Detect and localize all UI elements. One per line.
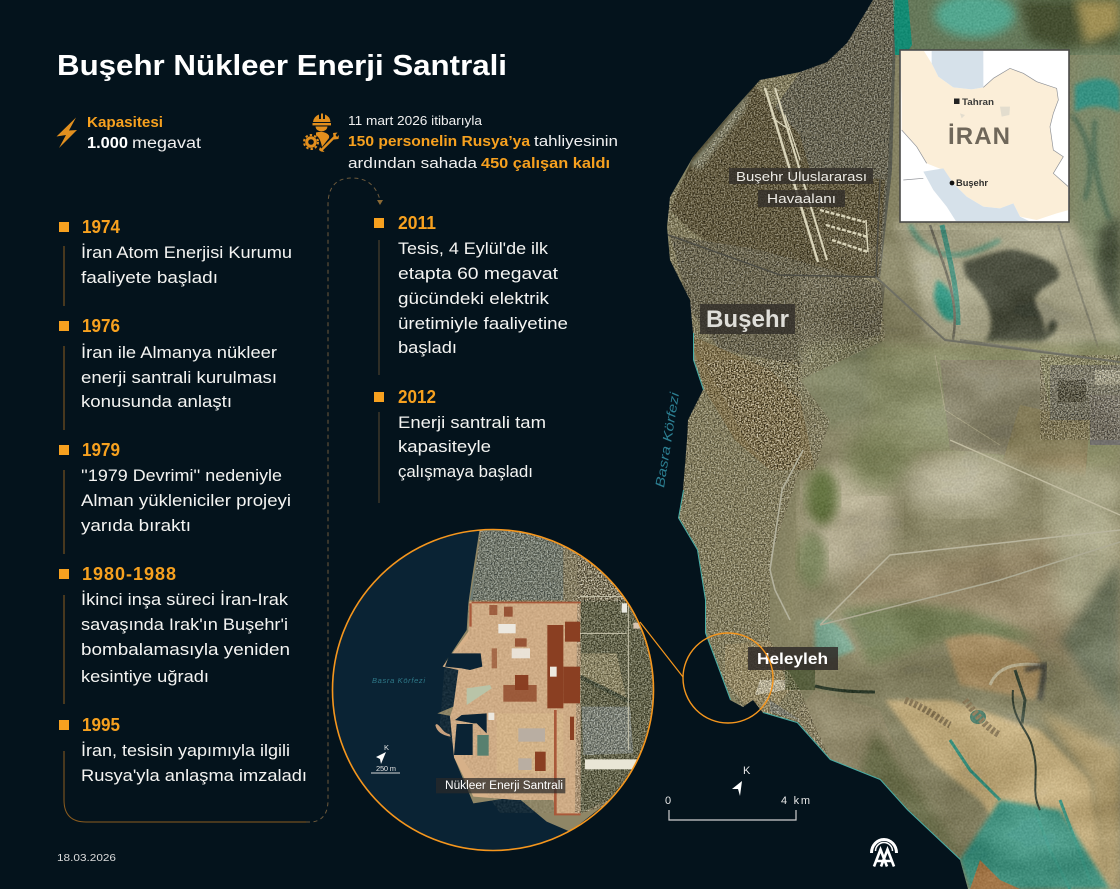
2011: gücündeki elektrik bbox=[398, 290, 550, 308]
plant rust blocks bbox=[489, 605, 580, 771]
1979 bbox=[59, 440, 291, 535]
1995: İran, tesisin yapımıyla ilgili bbox=[81, 741, 290, 760]
2011: başladı bbox=[398, 339, 457, 357]
plains south of the highway bbox=[868, 338, 1117, 467]
2012: 2012 bbox=[398, 387, 436, 407]
mottling and grain bbox=[800, 230, 1120, 889]
2011: üretimiyle faaliyetine bbox=[398, 315, 568, 333]
icon: worker bbox=[304, 114, 339, 152]
circle labels: 250 m bbox=[376, 764, 396, 773]
label: airport bbox=[729, 168, 873, 207]
label band bbox=[436, 778, 565, 793]
1980-1988: 1980-1988 bbox=[82, 564, 176, 584]
locator map: Iran bbox=[900, 50, 1069, 222]
green scrub bbox=[580, 600, 653, 813]
1974 bbox=[59, 217, 292, 287]
2012: kapasiteyle bbox=[398, 438, 491, 456]
roads bbox=[660, 180, 1120, 625]
country name: İRAN bbox=[948, 123, 1010, 150]
AA logo bbox=[872, 840, 896, 866]
date: 18.03.2026 bbox=[57, 852, 116, 864]
mudflats bbox=[780, 430, 1120, 740]
personnel note: 11 mart 2026 itibarıyla bbox=[348, 114, 482, 128]
1979: ''1979 Devrimi'' nedeniyle bbox=[81, 467, 282, 485]
1980-1988: bombalamasıyla yeniden bbox=[81, 641, 290, 659]
shallow coast bbox=[678, 333, 960, 860]
1980-1988: İkinci inşa süreci İran-Irak bbox=[81, 590, 289, 609]
1976 bbox=[59, 316, 278, 411]
timeline: left column bbox=[59, 217, 307, 785]
1976: İran ile Almanya nükleer bbox=[81, 343, 278, 362]
detail land bbox=[438, 530, 609, 831]
circle labels: Basra Körfezi bbox=[372, 676, 425, 685]
harbour basins bbox=[435, 653, 489, 756]
1995 bbox=[59, 715, 307, 785]
timeline connector bbox=[64, 178, 383, 822]
label: Basra Körfezi: Basra Körfezi bbox=[652, 390, 682, 488]
2012: Enerji santrali tam bbox=[398, 414, 546, 432]
label: Buşehr: Buşehr bbox=[706, 306, 789, 333]
satellite map bbox=[660, 0, 1120, 889]
1974: faaliyete başladı bbox=[81, 269, 218, 287]
map scale and north arrow: K bbox=[743, 765, 751, 777]
inset circle: nuclear plant detail bbox=[332, 528, 654, 852]
personnel note: 450 çalışan kaldı bbox=[481, 155, 610, 172]
1979: 1979 bbox=[82, 440, 120, 460]
Heleyleh town bbox=[725, 640, 815, 720]
1995: 1995 bbox=[82, 715, 120, 735]
capacity: 1.000 bbox=[87, 135, 128, 152]
timeline: right column bbox=[374, 213, 568, 481]
1979: yarıda bıraktı bbox=[81, 517, 191, 535]
map scale and north arrow bbox=[665, 765, 810, 820]
capacity: megavat bbox=[132, 135, 202, 152]
2011: etapta 60 megavat bbox=[398, 265, 558, 283]
airport runways bbox=[765, 88, 868, 262]
1974: İran Atom Enerjisi Kurumu bbox=[81, 243, 292, 262]
2012: çalışmaya başladı bbox=[398, 463, 533, 481]
2011: Tesis, 4 Eylül'de ilk bbox=[398, 240, 549, 258]
circle labels: Nükleer Enerji Santrali bbox=[445, 780, 563, 792]
personnel note: ardından sahada bbox=[348, 155, 478, 172]
1995: Rusya'yla anlaşma imzaladı bbox=[81, 767, 307, 785]
river channel bbox=[815, 686, 875, 692]
map scale and north arrow: 4 km bbox=[781, 795, 810, 807]
1974: 1974 bbox=[82, 217, 120, 237]
circle labels bbox=[371, 676, 563, 792]
label: Heleyleh: Heleyleh bbox=[757, 651, 828, 668]
plant buildings bbox=[467, 624, 557, 770]
title: Buşehr Nükleer Enerji Santrali bbox=[57, 50, 507, 82]
central salt flats, marsh and lagoon bbox=[892, 222, 1120, 360]
Bushehr marker bbox=[950, 180, 988, 188]
map scale and north arrow: 0 bbox=[665, 795, 671, 807]
icon: lightning bbox=[56, 118, 77, 148]
zoom connector circle bbox=[640, 622, 773, 723]
label: Heleyleh bbox=[748, 647, 838, 670]
1979: Alman yükleniciler projeyi bbox=[81, 492, 291, 510]
capacity: Kapasitesi bbox=[87, 115, 163, 131]
2011 bbox=[374, 213, 568, 357]
label: airport: Buşehr Uluslararası bbox=[736, 169, 867, 184]
settlement bbox=[470, 530, 563, 600]
Tehran marker: Tahran bbox=[962, 97, 994, 108]
southern tidal flats bbox=[790, 690, 1120, 889]
personnel note bbox=[348, 114, 618, 172]
1976: 1976 bbox=[82, 316, 120, 336]
label: airport: Havaalanı bbox=[767, 191, 836, 206]
1980-1988 bbox=[59, 564, 290, 686]
circle labels: K bbox=[384, 743, 389, 752]
1980-1988: savaşında Irak'ın Buşehr'i bbox=[81, 616, 288, 634]
1976: konusunda anlaştı bbox=[81, 393, 232, 411]
Tehran marker bbox=[954, 98, 994, 105]
northern city and airport ground bbox=[670, 0, 897, 470]
plant grounds bbox=[443, 602, 581, 815]
1980-1988: kesintiye uğradı bbox=[81, 668, 209, 686]
personnel note: 150 personelin Rusya’ya bbox=[348, 133, 531, 150]
2012 bbox=[374, 387, 546, 481]
personnel note: tahliyesinin bbox=[534, 133, 618, 150]
1976: enerji santrali kurulması bbox=[81, 369, 277, 387]
industrial zone bbox=[1050, 365, 1120, 445]
capacity bbox=[87, 115, 202, 152]
top-right wetlands bbox=[893, 0, 1120, 380]
Bushehr marker: Buşehr bbox=[956, 178, 988, 189]
2011: 2011 bbox=[398, 213, 436, 233]
